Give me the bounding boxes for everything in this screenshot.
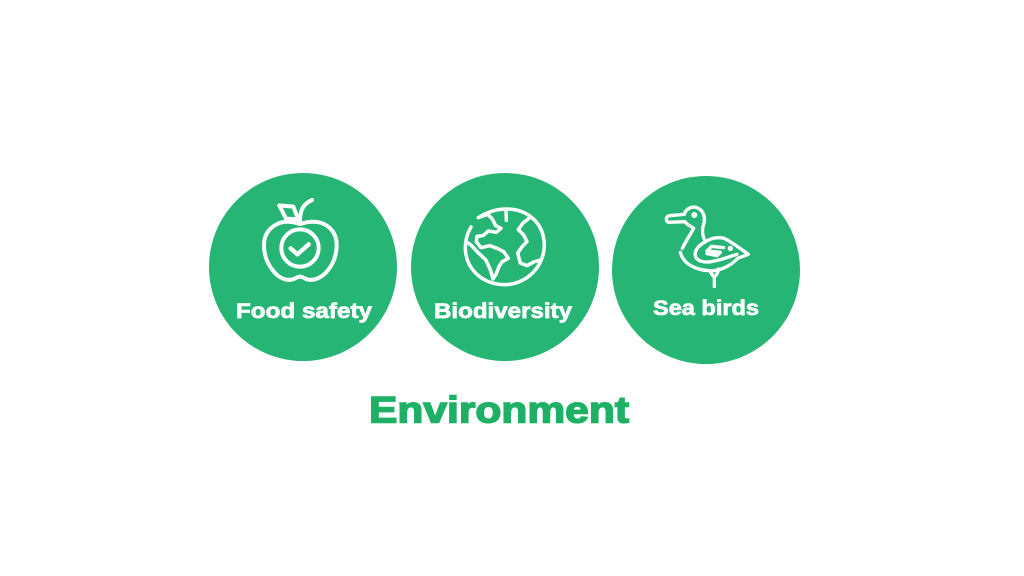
panel: biodiversity	[411, 173, 599, 361]
icon: apple with check mark	[264, 200, 337, 280]
icon: globe	[465, 209, 544, 285]
circle: sea birds background	[612, 176, 800, 364]
heading: environment: Environment	[369, 388, 630, 430]
label: biodiversity: Biodiversity	[434, 299, 572, 323]
circle: biodiversity background	[411, 173, 599, 361]
circle: food safety background	[209, 173, 397, 361]
label: food safety: Food safety	[236, 299, 372, 323]
panel: food safety	[209, 173, 397, 361]
panel: sea birds	[612, 176, 800, 364]
icon: sea bird	[666, 207, 748, 286]
label: sea birds: Sea birds	[653, 296, 759, 320]
